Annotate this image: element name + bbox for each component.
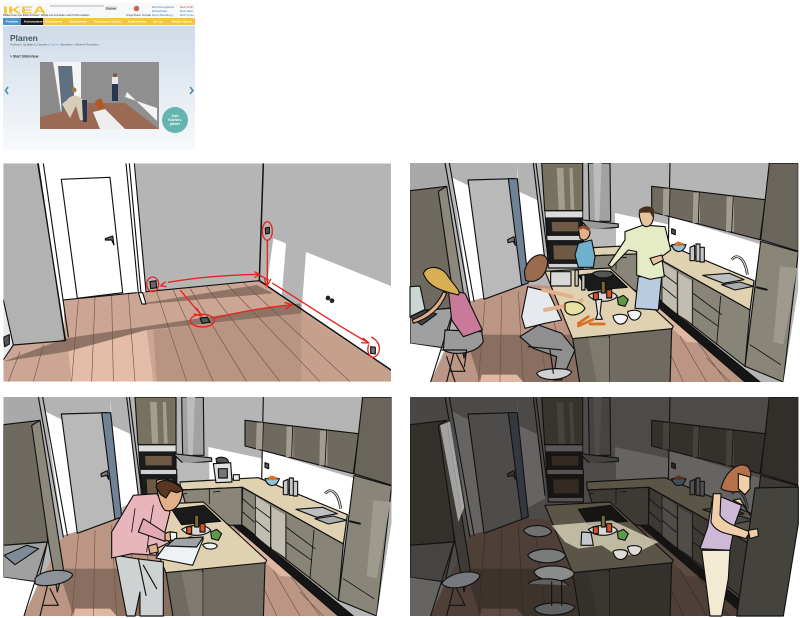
- figure: woman on stool: [520, 255, 585, 380]
- slideshow link: > Start Slideshow: [10, 54, 39, 58]
- open book and plate: [156, 537, 217, 565]
- header links: Einrichtungsplaner: [152, 5, 174, 9]
- slideshow image: [40, 62, 159, 129]
- figure: woman at laptop: [410, 267, 483, 382]
- logo: IKEA: IKEA: [3, 4, 47, 16]
- tray on table: [4, 545, 39, 565]
- header links: Mein Profil: [180, 5, 193, 9]
- hand on door: [748, 529, 758, 539]
- navigation bar: Service: [153, 20, 163, 24]
- panel: website screenshot: [3, 3, 195, 151]
- breadcrumb: Portfolio | Qualität & Garantie | Planen | Bestellen | Weitere Produkte |: [10, 42, 100, 46]
- button: Zum Küchenplaner: Zum: [171, 114, 179, 118]
- navigation bar: Küchenplaner: [24, 20, 44, 24]
- header links: Mein Haus: [180, 9, 194, 13]
- heading: Planen: Planen: [10, 33, 38, 43]
- figure: man in pink shirt: [112, 479, 183, 616]
- header links: Einkaufsliste: [152, 9, 168, 13]
- header links: Mein Konto: [180, 13, 194, 17]
- navigation bar: Kinderzimmer: [128, 20, 148, 24]
- header links: Fragen/Mein Kontakt: [126, 13, 151, 17]
- figure: woman in lilac top: [700, 465, 752, 616]
- fridge door: [737, 487, 798, 616]
- panel: woman at fridge at night: [410, 397, 798, 618]
- button: Zum Küchenplaner: [162, 107, 188, 133]
- navigation bar: Wohnzimmer: [45, 20, 63, 24]
- header links: [3, 5, 194, 17]
- navigation bar: Schlafzimmer: [69, 20, 88, 24]
- figure: boy: [575, 226, 595, 267]
- search field: Suchen: [106, 7, 117, 11]
- header links: Meine Bestellung: [152, 13, 173, 17]
- figure: man cooking: [608, 206, 671, 310]
- button: Zum Küchenplaner: Küchen-: [168, 118, 182, 122]
- icon: flag: [134, 6, 139, 11]
- navigation bar: Esszimmer & Küche: [94, 20, 121, 24]
- button: Zum Küchenplaner: planer: [170, 122, 181, 126]
- arrow: next: [190, 87, 193, 94]
- night shade overlay: [410, 397, 798, 616]
- pan and bottle: [551, 270, 613, 290]
- arrows: red cable routes: [147, 222, 379, 357]
- stool: [35, 570, 73, 586]
- panel: empty room with red cable routing: [3, 163, 391, 382]
- panel: family in kitchen: [405, 160, 800, 387]
- search field: [50, 5, 117, 11]
- carrots and bowls: [578, 299, 641, 326]
- moonlight on cabinet side: [440, 421, 464, 522]
- glass and bowls: [581, 532, 642, 560]
- moonlight patch on island: [552, 520, 658, 555]
- navigation bar: Produkte: [6, 20, 19, 24]
- coffee machine: [213, 457, 239, 483]
- header links: Willkommen bei IKEA Schweiz. Wähle bei Anmelden oder Profil erstellen: [3, 13, 90, 17]
- panel: man reading at kitchen island: [3, 397, 392, 618]
- bar stools: [442, 526, 575, 615]
- navigation bar: [3, 18, 195, 25]
- arrow: previous: [6, 87, 8, 94]
- navigation bar: Weitere Räume: [172, 20, 193, 24]
